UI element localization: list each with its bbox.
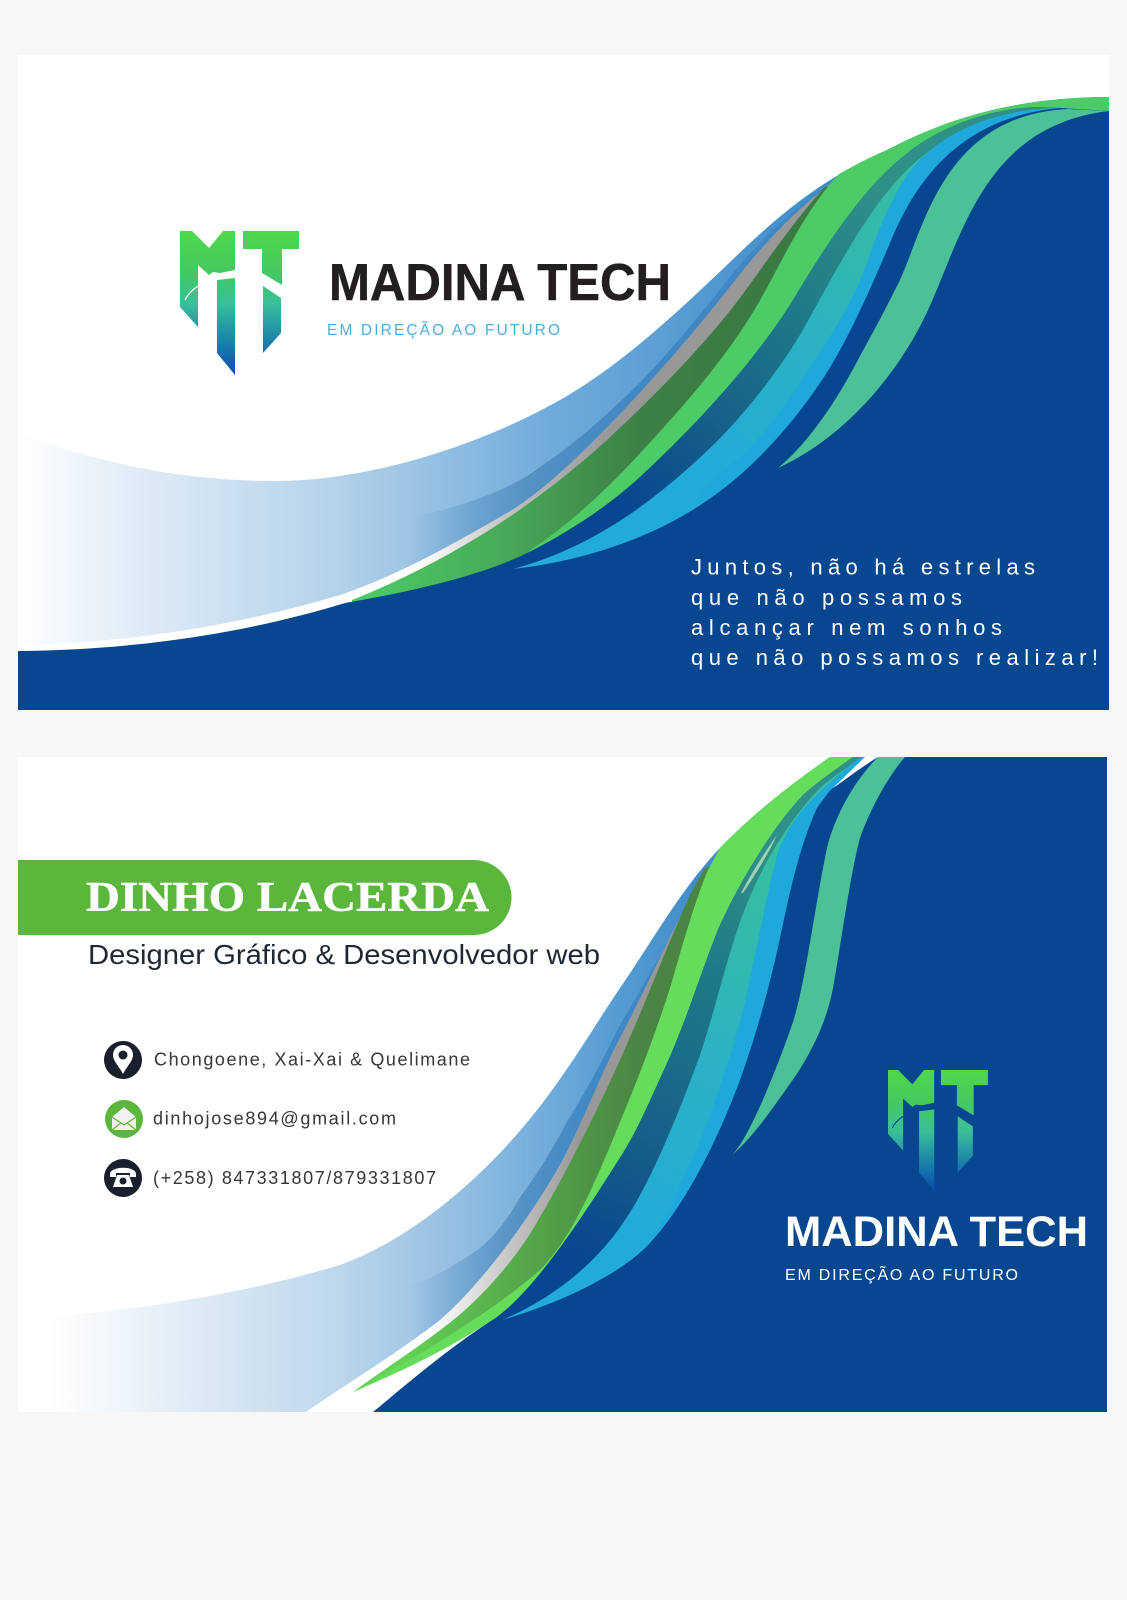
address: Chongoene, Xai-Xai & Quelimane (154, 1050, 470, 1070)
wave ribbons (18, 97, 1109, 710)
quote text: que não possamos (691, 585, 962, 610)
quote text (691, 554, 1098, 670)
person name: DINHO LACERDA (86, 875, 490, 921)
job title: Designer Gráfico & Desenvolvedor web (88, 939, 600, 970)
tagline: EM DIREÇÃO AO FUTURO (327, 322, 560, 339)
wave ribbons (18, 750, 1107, 1412)
icon: email envelope (105, 1100, 143, 1138)
tagline: EM DIREÇÃO AO FUTURO (785, 1264, 1018, 1284)
card white background (18, 757, 1107, 1412)
icon: MT logo (888, 1070, 988, 1191)
quote text: Juntos, não há estrelas (691, 554, 1035, 580)
quote text: que não possamos realizar! (691, 645, 1098, 670)
icon: MT logo (180, 231, 299, 375)
phone numbers: (+258) 847331807/879331807 (153, 1168, 436, 1188)
brand name: MADINA TECH (329, 254, 671, 312)
panel: business card back (18, 750, 1107, 1412)
quote text: alcançar nem sonhos (691, 615, 1002, 640)
icon: telephone (104, 1159, 142, 1197)
icon: location pin (104, 1041, 142, 1079)
name pill (18, 860, 512, 935)
card white background (18, 55, 1109, 710)
brand name: MADINA TECH (785, 1208, 1088, 1256)
email address: dinhojose894@gmail.com (153, 1108, 396, 1128)
panel: business card front (18, 55, 1109, 710)
